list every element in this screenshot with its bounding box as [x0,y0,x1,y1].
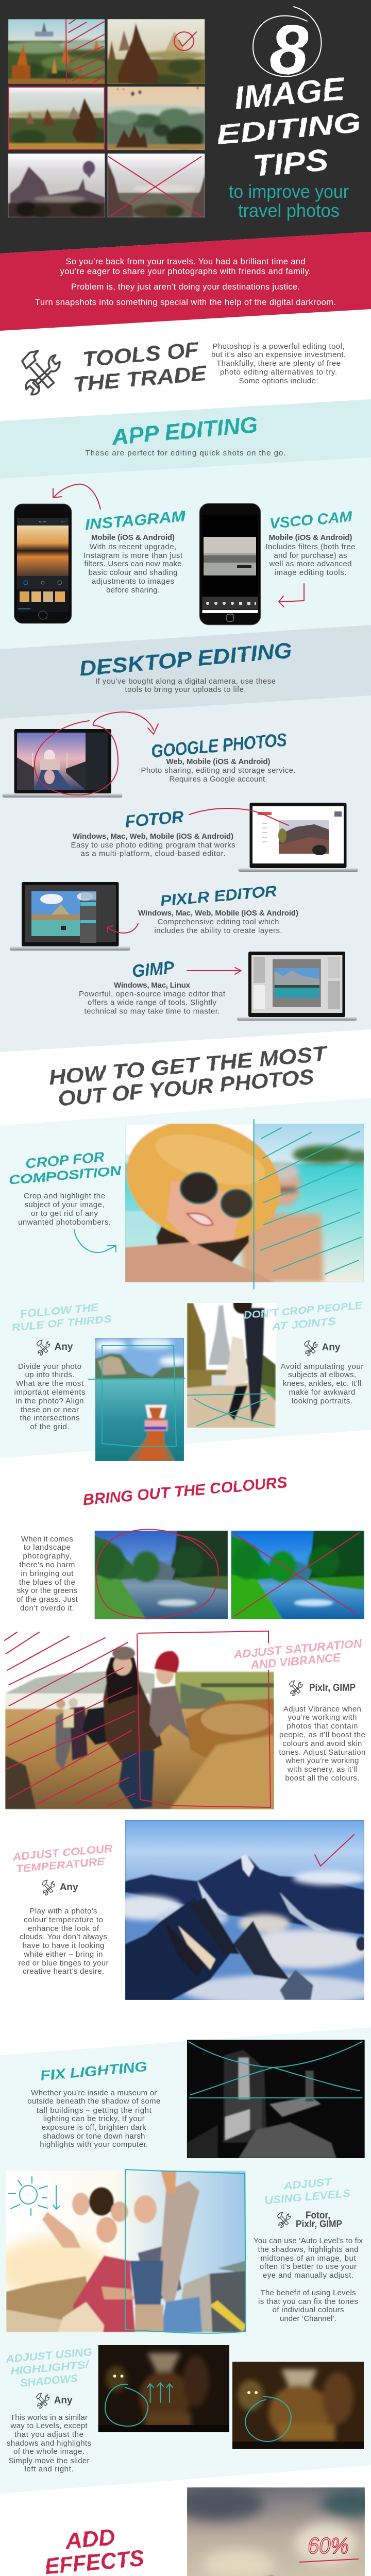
photo: cathedral dark with teal marks [98,2345,229,2432]
intro text: you’re eager to share your photographs with friends and family. [60,267,311,276]
icon: hammer and wrench [22,351,60,395]
text: photoshop alternatives [211,342,346,385]
photo: misty temple with red cross [107,154,205,217]
text: app editing intro: These are perfect for editing quick shots on the go. [86,449,285,457]
text: adjust saturation and vibrance: ADJUST SATURATION [232,1637,363,1661]
intro text [35,257,336,307]
red check mark [315,1835,354,1866]
text: rule of thirds [11,1301,112,1431]
text: instagram: basic colour and shading [89,568,177,577]
text: desktop editing intro [95,677,276,694]
text: adjust using levels: midtones of an image, but [261,2254,356,2263]
text: adjust colour temperature: ADJUST COLOUR [12,1843,113,1863]
text: adjust saturation and vibrance: boost all the colours. [285,1774,359,1783]
icon: tools any: Any [322,1342,341,1353]
photo: mountains above clouds with check [110,1820,371,2006]
icon: tools any [42,1880,78,1895]
text: vsco cam: well as more advanced [269,560,351,568]
photo: arcade black and white with perspective lines [187,2040,365,2158]
text: adjust using highlights shadows: of the whole image. [13,2447,85,2456]
icon: tools pixlr gimp: Pixlr, GIMP [309,1683,356,1693]
icon: tools fotor pixlr gimp: Pixlr, GIMP [296,2219,342,2230]
photo: crop for composition [112,1104,370,1289]
subtitle: travel photos [238,200,340,221]
text: adjust using levels: eye and manually adjust. [263,2271,353,2280]
icon: tools any: Any [55,1342,73,1352]
panel: tools of the trade [22,337,346,396]
text: landscape colours: to landscape [24,1543,71,1552]
text: fix lighting: tall buildings – getting the right [37,2106,152,2115]
heading: add effects: ADD [64,2524,116,2554]
photo: family in dunes with hatching [5,1631,274,1809]
text: adjust using highlights shadows [5,2346,93,2473]
text: vsco cam: and for purchase) as [274,551,347,560]
intro text: Problem is, they just aren’t doing your destinations justice. [71,282,300,292]
text: rule of thirds: What are the most [16,1379,84,1388]
heading: tools of the trade [72,337,208,396]
text: photoshop alternatives: but it’s also an expensive investment. [211,350,346,359]
text: don't crop people: looking portraits. [292,1397,352,1405]
title: image editing tips: EDITING [215,107,362,150]
heading: tools of the trade: THE TRADE [72,361,208,396]
text: instagram: before sharing. [106,586,160,595]
text: landscape colours: of the grass. Just [16,1595,78,1604]
heading: app editing: APP EDITING [110,412,259,450]
text: don't crop people: make for awkward [289,1388,356,1397]
text: fotor: Easy to use photo editing program that works [71,841,235,850]
text: adjust using levels: You can use ‘Auto Level’s to fix [254,2236,363,2245]
photo: misty temple with balloon [8,154,105,217]
icon: tools pixlr gimp [289,1681,356,1696]
heading: desktop editing: DESKTOP EDITING [78,638,293,681]
icon: hand-drawn sun and down arrow [9,2177,60,2215]
text: crop for composition: COMPOSITION [8,1163,123,1188]
panel: title header [0,0,371,253]
text: crop for composition: Crop and highlight the [24,1192,105,1200]
text: photoshop alternatives: photo editing alternatives to try. [220,368,337,377]
text: instagram: Instagram is more than just [83,551,183,560]
text: don't crop people: AT JOINTS [271,1316,336,1333]
text: fix lighting: FIX LIGHTING [40,2059,148,2083]
icon: tools fotor pixlr gimp: Fotor, [306,2210,330,2221]
heading: how to get the most out of your photos: OUT OF YOUR PHOTOS [57,1064,315,1111]
text: instagram: filters. Users can now make [85,560,181,568]
text: landscape colours: in bringing out [21,1569,74,1578]
heading: how to get the most out of your photos [48,1041,329,1111]
text: vsco cam: Includes filters (both free [266,543,356,551]
title: image editing tips: IMAGE [233,71,347,116]
text: adjust using highlights shadows: way to Levels, except [10,2421,88,2430]
photo: temples 1 with red hatching [8,19,105,84]
text: pixlr editor [138,883,298,935]
photo: hiker above valley with 60% note [172,2485,371,2576]
text: adjust saturation and vibrance [232,1637,365,1783]
text: adjust using levels [254,2176,363,2323]
text: crop for composition: unwanted photobombers. [18,1218,111,1227]
text: photoshop alternatives: Some options include: [239,377,318,385]
text: instagram: adjustments to images [92,577,174,586]
red hatching over temple photo [66,20,104,82]
arrow: teal curved to photo [74,1230,116,1252]
text: rule of thirds: up into thirds. [25,1370,74,1379]
text: vsco cam: Mobile (iOS & Android) [269,533,352,542]
text: adjust using levels: often it’s better to use your [260,2262,357,2271]
text: pixlr editor: Comprehensive editing tool which [158,918,279,926]
heading: how to get the most out of your photos: HOW TO GET THE MOST [48,1041,329,1089]
text: crop for composition [8,1149,123,1227]
text: rule of thirds: FOLLOW THE [20,1301,99,1320]
phone: instagram [14,504,72,623]
text: adjust using levels: is that you can fix the tones [258,2297,358,2306]
text: don't crop people: DON’T CROP PEOPLE [243,1300,363,1321]
subtitle [229,181,349,221]
teal frame [125,2170,246,2333]
icon: tools fotor pixlr gimp [277,2210,342,2230]
text: google photos [141,730,296,784]
text: gimp: Windows, Mac, Linux [114,981,191,990]
phone: instagram: NEXT [61,521,66,523]
photo grid: temples of Bagan [3,19,210,218]
text: landscape colours: there’s no harm [19,1561,75,1569]
text: fotor: Windows, Mac, Web, Mobile (iOS & Android) [73,832,233,841]
text: adjust using highlights shadows: HIGHLIGHTS/ [10,2359,90,2378]
text: google photos: GOOGLE PHOTOS [150,730,288,761]
photo: temples 3 with red frame [8,87,105,150]
text: photoshop alternatives: Thankfully, there are plenty of free [216,359,341,368]
text: adjust using highlights shadows: ADJUST USING [5,2346,93,2365]
text: don't crop people: subjects at elbows, [288,1370,356,1379]
text: don't crop people: knees, ankles, etc. It’ll [283,1379,361,1388]
phone: instagram: FILTERS [39,521,47,523]
text: fix lighting: highlights with your computer. [40,2140,148,2149]
text: adjust using highlights shadows: This works in a similar [10,2413,88,2422]
text: crop for composition: CROP FOR [25,1149,106,1172]
laptop: gimp [237,952,357,1021]
title circle with number 8 [253,7,321,89]
text: adjust saturation and vibrance: when you’re working [285,1756,359,1765]
text: fix lighting: exposure is off, brighten dark [42,2123,146,2132]
text: gimp [79,958,226,1016]
text: landscape colours: sky or the greens [17,1586,77,1595]
text: rule of thirds: important elements [14,1388,86,1397]
text: fotor: as a multi-platform, cloud-based editor. [80,849,226,858]
photo: couple at Eiffel Tower [187,1295,276,1428]
arrow: red to fotor laptop [189,808,289,825]
text: adjust colour temperature: white either – bring in [24,1950,103,1959]
text: adjust colour temperature: enhance the look of [28,1924,99,1933]
arrow: red circle and curved arrow [35,712,158,795]
text: adjust using levels: USING LEVELS [264,2188,351,2207]
text: adjust colour temperature: Play with a photo’s [30,1907,97,1916]
text: rule of thirds: RULE OF THIRDS [11,1314,112,1333]
photo: temples 4 with balloons [107,87,205,150]
text: rule of thirds: of the grid. [30,1422,69,1431]
text: adjust saturation and vibrance: tones. Adjust Saturation [279,1748,365,1757]
text: pixlr editor: includes the ability to create layers. [155,926,282,935]
text: pixlr editor: Windows, Mac, Web, Mobile (iOS & Android) [138,909,298,918]
text: adjust using levels: of individual colours [272,2306,344,2314]
red 60% note: 60% [308,2533,349,2558]
panel: red intro band [0,232,371,331]
text: adjust colour temperature: creative heart’s desire. [23,1967,104,1976]
teal perspective lines [189,2042,362,2098]
text: instagram: Mobile (iOS & Android) [91,533,175,542]
text: adjust saturation and vibrance: Adjust Vibrance when [283,1705,361,1714]
text: adjust saturation and vibrance: people, as it’ll boost the [279,1731,365,1739]
text: don't crop people: Avoid amputating your [280,1362,364,1371]
text: instagram: With its recent upgrade, [90,543,176,551]
text: gimp: technical so may take time to master. [85,1007,220,1016]
text: landscape colours [16,1535,78,1613]
teal crop grid [89,1346,185,1447]
text: vsco cam [266,509,356,577]
text: adjust using highlights shadows: SHADOWS [20,2372,78,2389]
text: adjust using highlights shadows: that you adjust the [14,2430,83,2439]
teal underline and cross [188,1394,275,1426]
text: adjust using levels: ADJUST [283,2176,333,2192]
heading: bring out the colours: BRING OUT THE COLOURS [82,1474,288,1509]
text: instagram: INSTAGRAM [84,507,187,533]
text: vsco cam: VSCO CAM [268,509,353,532]
text: fotor: FOTOR [124,807,184,831]
text: adjust saturation and vibrance: you’re working with [288,1713,357,1722]
text: google photos: Requires a Google account. [169,775,267,784]
text: fix lighting: lighting can be tricky. If your [43,2114,145,2123]
text: landscape colours: photography, [23,1552,71,1561]
panel: desktop editing [0,625,371,1052]
photo: cathedral brightened with teal circle [232,2362,364,2449]
text: adjust using highlights shadows: left and right. [25,2465,73,2473]
icon: tools any [37,1340,73,1355]
text: fix lighting: shadows or tone down harsh [43,2132,145,2141]
red hatching and frame [5,1631,271,1807]
text: fix lighting: outside beneath the shadow of some [27,2097,160,2106]
text: rule of thirds: Divide your photo [18,1362,81,1371]
text: google photos: Web, Mobile (iOS & Android) [166,757,270,766]
text: fix lighting: Whether you’re inside a museum or [31,2089,157,2097]
laptop: google photos [3,729,122,798]
text: vsco cam: image editing tools. [274,568,346,577]
text: gimp: Powerful, open-source image editor that [79,990,226,998]
title circle with number 8: 8 [269,10,309,89]
text: rule of thirds: the intersections [20,1414,79,1422]
icon: tools any: Any [60,1882,78,1893]
photo: river natural with red circle [95,1529,228,1619]
panel: add effects [0,2485,371,2576]
text: gimp: offers a wide range of tools. Slightly [88,998,216,1007]
text: adjust using levels: the shadows, highlights and [258,2245,359,2254]
photo: boat on lake with grid [89,1338,186,1461]
text: adjust using highlights shadows: shadows and highlights [7,2439,91,2448]
text: rule of thirds: in the photo? Align [15,1397,83,1405]
icon: tools any: Any [54,2395,73,2406]
text: adjust using highlights shadows: Simply move the slider [8,2456,90,2465]
text: adjust saturation and vibrance: photos that contain [286,1722,358,1731]
text: adjust colour temperature: clouds. You don’t always [20,1933,107,1941]
photo: friends by the road with teal frame and sun [0,2170,246,2333]
text: adjust using levels: The benefit of using Levels [261,2289,356,2297]
photo: river oversaturated with red cross [231,1531,364,1619]
text: fotor [71,807,235,858]
text: adjust saturation and vibrance: with scenery, as it’ll [287,1765,357,1774]
text: adjust colour temperature [12,1843,113,1976]
heading: tools of the trade: TOOLS OF [81,337,200,371]
laptop: pixlr editor [10,882,130,951]
panel: composition tips [0,1098,371,1461]
text: adjust saturation and vibrance: colours and avoid skin [282,1739,362,1748]
text: fix lighting [27,2059,160,2149]
text: adjust colour temperature: have to have it looking [23,1941,104,1950]
heading: add effects [44,2524,145,2576]
teal circle and arrows [105,2383,173,2426]
text: pixlr editor: PIXLR EDITOR [160,883,278,910]
red 60% note [300,2533,358,2562]
text: crop for composition: or to get rid of any [31,1209,98,1218]
text: desktop editing intro: If you’ve bought along a digital camera, use these [95,677,276,686]
text: instagram [83,507,187,595]
phone: vsco cam [199,503,261,625]
text: google photos: Photo sharing, editing and storage service. [141,766,296,775]
text: adjust colour temperature: red or blue tinges to your [19,1959,108,1968]
text: photoshop alternatives: Photoshop is a powerful editing tool, [212,342,344,351]
intro text: So you’re back from your travels. You had a brilliant time and [66,257,305,266]
photo: temples 2 with red check [107,19,205,84]
arrow: red to gimp laptop [187,968,241,974]
intro text: Turn snapshots into something special with the help of the digital darkroom. [35,298,336,307]
text: adjust saturation and vibrance: AND VIBRANCE [250,1651,342,1672]
text: adjust colour temperature: TEMPERATURE [15,1856,106,1875]
title: image editing tips: TIPS [251,143,330,183]
arrow: red curved to phone [53,484,100,509]
text: gimp: GIMP [131,958,175,981]
arrow: red bent to phone [279,584,304,607]
text: landscape colours: When it comes [21,1535,73,1544]
icon: tools any [304,1341,341,1355]
text: adjust using levels: under ‘Channel’. [280,2314,336,2323]
text: adjust colour temperature: colour temperature to [24,1916,103,1924]
subtitle: to improve your [229,181,349,202]
icon: tools any [36,2393,73,2408]
arrow: red to pixlr laptop [107,924,138,933]
text: landscape colours: don’t overdo it. [20,1604,74,1613]
laptop: fotor [238,803,358,872]
text: rule of thirds: these on or near [21,1405,79,1414]
panel: fix lighting [0,2027,371,2494]
teal hatching [254,1120,362,1289]
text: don't crop people [243,1300,364,1405]
title: image editing tips [215,71,362,183]
panel: app editing [0,399,371,649]
text: desktop editing intro: tools to bring your uploads to life. [125,685,246,694]
text: landscape colours: the blues of the [19,1578,75,1587]
red circled check mark [174,32,196,50]
panel: bring out the colours [5,1474,371,2006]
text: crop for composition: subject of your image, [25,1200,104,1209]
